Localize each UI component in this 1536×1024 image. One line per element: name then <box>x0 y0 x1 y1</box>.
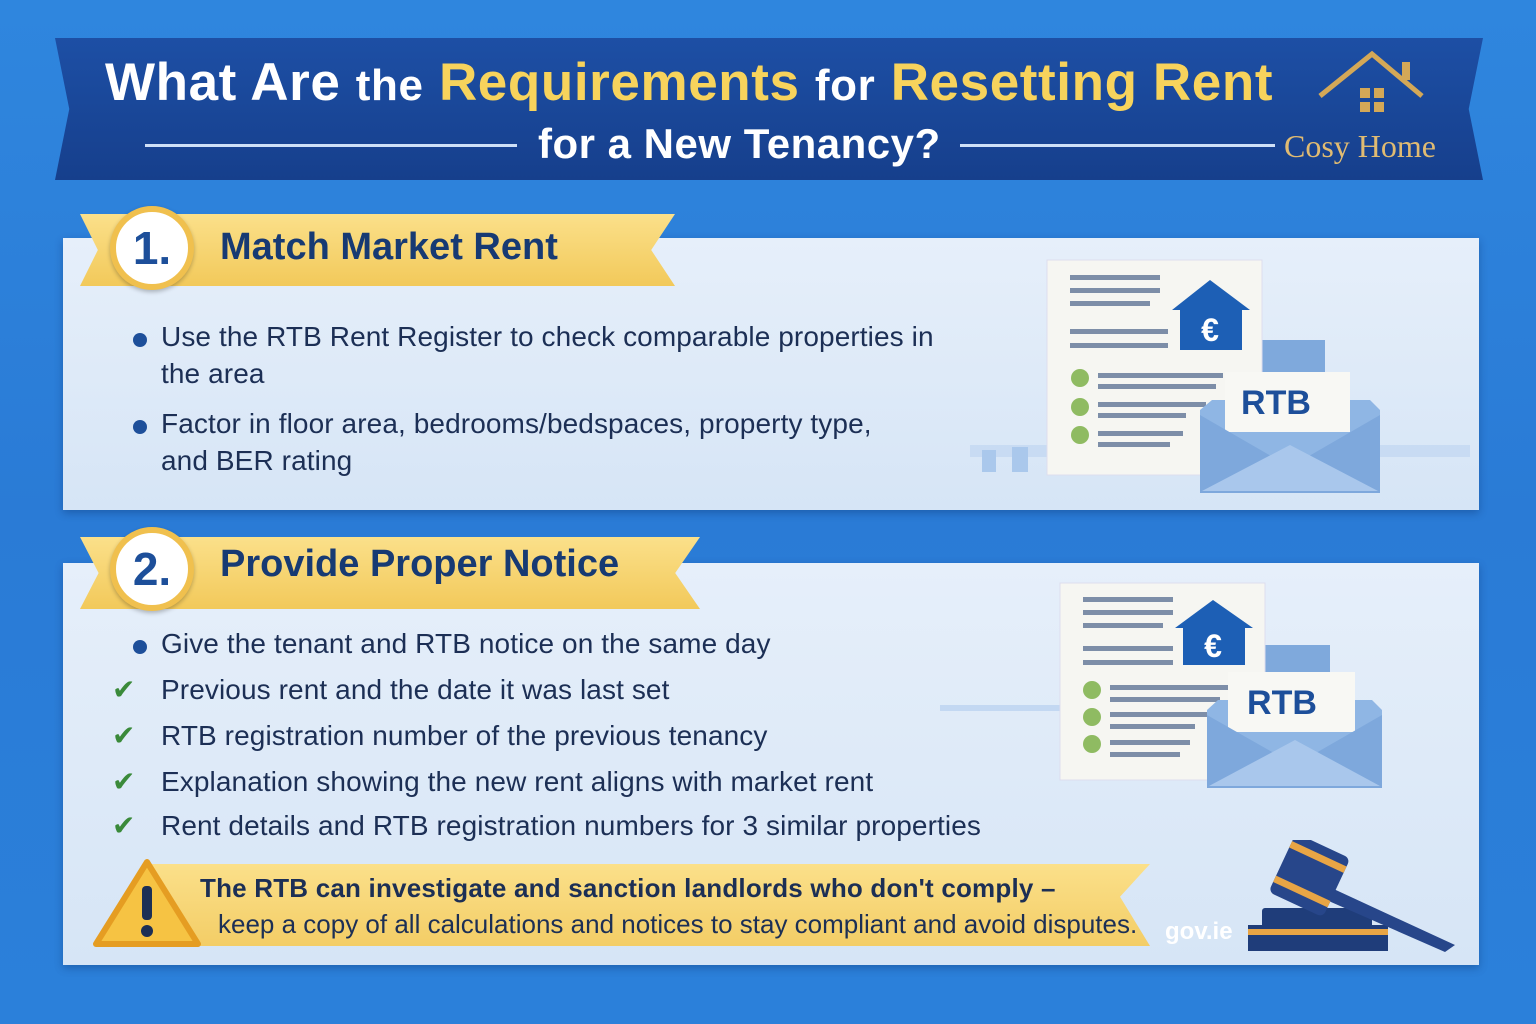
icon: document and RTB envelope 1: € <box>1201 312 1219 348</box>
source label: gov.ie <box>1165 918 1233 945</box>
heading 2: Provide Proper Notice <box>220 543 619 585</box>
list panel 2: ✔ <box>112 674 135 705</box>
title banner <box>55 38 1483 180</box>
bullets panel 1: and BER rating <box>161 445 352 476</box>
list panel 2: ✔ <box>112 766 135 797</box>
icon: document and RTB envelope 2: RTB <box>1247 684 1317 722</box>
number 2: 2. <box>133 543 171 595</box>
list panel 2 <box>112 628 981 841</box>
title line 2: for a New Tenancy? <box>538 120 941 167</box>
number 2 <box>110 527 194 611</box>
bullets panel 1: Use the RTB Rent Register to check comparable properties in <box>161 321 934 352</box>
ribbon 2 <box>80 537 700 609</box>
list panel 2: Explanation showing the new rent aligns with market rent <box>161 766 873 797</box>
heading 1: Match Market Rent <box>220 226 558 268</box>
logo: Cosy Home: Cosy Home <box>1284 128 1436 164</box>
number 1: 1. <box>133 222 171 274</box>
bullets panel 1 <box>133 321 934 476</box>
ribbon 1 <box>80 214 675 286</box>
bullets panel 1: the area <box>161 358 265 389</box>
panel 2: provide proper notice <box>63 563 1479 965</box>
icon: gavel <box>1248 840 1455 952</box>
bullets panel 1: Factor in floor area, bedrooms/bedspaces, property type, <box>161 408 872 439</box>
logo: Cosy Home <box>1285 50 1435 164</box>
panel 1: match market rent <box>63 238 1479 510</box>
list panel 2: Rent details and RTB registration numbers for 3 similar properties <box>161 810 981 841</box>
icon: document and RTB envelope 2: € <box>1204 628 1222 664</box>
list panel 2: ✔ <box>112 810 135 841</box>
warning text: The RTB can investigate and sanction landlords who don't comply – <box>200 873 1056 903</box>
icon: warning triangle <box>93 859 201 947</box>
list panel 2: Give the tenant and RTB notice on the same day <box>161 628 771 659</box>
icon: document and RTB envelope 1 <box>970 260 1470 493</box>
callout: warning strip: keep a copy of all calculations and notices to stay compliant and avoid disputes. <box>218 909 1137 939</box>
list panel 2: Previous rent and the date it was last set <box>161 674 669 705</box>
icon: document and RTB envelope 2 <box>940 582 1382 788</box>
list panel 2: ✔ <box>112 720 135 751</box>
title line 1: What Are the Requirements for Resetting Rent <box>105 53 1273 112</box>
callout: warning strip <box>93 859 1233 947</box>
list panel 2: RTB registration number of the previous tenancy <box>161 720 768 751</box>
icon: document and RTB envelope 1: RTB <box>1241 384 1311 422</box>
number 1 <box>110 206 194 290</box>
